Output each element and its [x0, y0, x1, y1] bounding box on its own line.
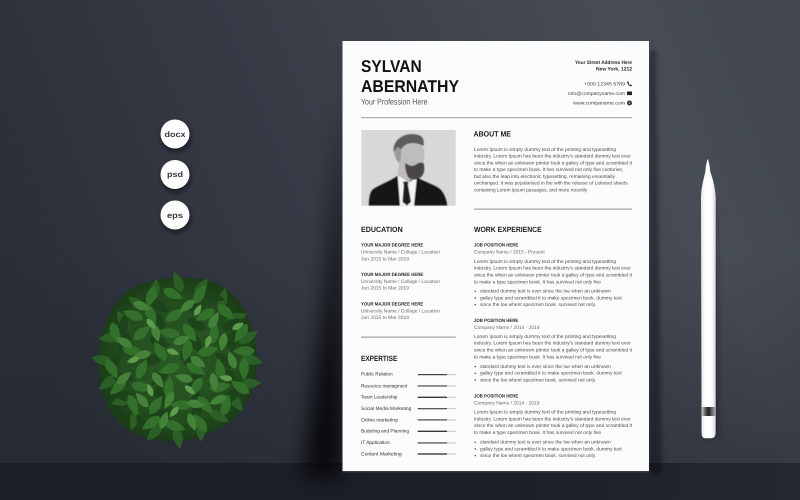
job entry 3: Lorem Ipsum is simply dummy text of the printing and typesetting [474, 410, 616, 416]
contact details [568, 81, 632, 107]
job entry 2: since the loe whent specimen book. survived not only. [480, 377, 596, 383]
section: education: Jun 2015 to Mar 2019 [361, 256, 409, 262]
job entry 3: since the loe whent specimen book. survived not only. [480, 453, 596, 459]
stylus pencil [701, 159, 719, 440]
section: about me: to make a type specimen book. It has survived not only five centuries, [474, 167, 623, 173]
job entry 1: JOB POSITION HERE [474, 243, 518, 248]
section: expertise: Resource managment [361, 383, 408, 389]
job entry 1: since the when an unknown printer took a galley of type and scrambled it [474, 273, 633, 279]
address block [575, 60, 632, 72]
section: education: Jun 2015 to Mar 2019 [361, 315, 409, 321]
profession: Your Profession Here [361, 96, 428, 106]
section: work experience: WORK EXPERIENCE [474, 225, 542, 234]
section: expertise: Team Leadership [361, 395, 398, 401]
section: about me: ABOUT ME [474, 130, 511, 139]
job entry 2: since the when an unknown printer took a galley of type and scrambled it [474, 348, 633, 354]
format badges [160, 120, 190, 232]
address block: New York, 1212 [596, 66, 632, 72]
section: education: University Name / Collage / Location [361, 308, 440, 314]
section: expertise: Social Media Marketing [361, 406, 412, 412]
name heading: SYLVAN [361, 57, 422, 76]
job entry 3: Company Name / 2014 - 2019 [474, 400, 540, 406]
contact details: info@companyname.com [568, 91, 625, 97]
skill bars [418, 374, 456, 455]
section: about me: industry. Lorem Ipsum has been the industry's standard dummy text ever [474, 154, 631, 160]
job entry 1: standard dummy text is ever since the loe when an unknown [480, 289, 611, 295]
section: expertise: Content Marketing [361, 451, 402, 457]
name heading: ABERNATHY [361, 77, 460, 96]
job entry 3 [474, 394, 633, 459]
badge: psd: psd [167, 170, 183, 179]
contact details: www.companame.com [573, 102, 625, 107]
section: education: University Name / Collage / Location [361, 250, 440, 256]
job entry 1: galley type and scrambled it to make specimen book. dummy text [480, 295, 622, 301]
section: about me: containing Lorem Ipsum passages, and more recently [474, 187, 588, 193]
job entry 1: Lorem Ipsum is simply dummy text of the printing and typesetting [474, 259, 616, 265]
job entry 2: JOB POSITION HERE [474, 318, 518, 323]
badge: docx: docx [164, 130, 186, 139]
job entry 3: standard dummy text is ever since the loe when an unknown [480, 440, 611, 446]
badge: eps: eps [167, 211, 184, 220]
plant seen from above [90, 270, 264, 450]
job entry 3: galley type and scrambled it to make specimen book. dummy text [480, 446, 622, 452]
section: education: YOUR MAJOR DEGREE HERE [361, 243, 423, 248]
section: expertise: EXPERTISE [361, 354, 397, 363]
section: education: YOUR MAJOR DEGREE HERE [361, 272, 423, 277]
job entry 2: Lorem Ipsum is simply dummy text of the printing and typesetting [474, 334, 616, 340]
section: about me: unchanged. It was popularised in the with the release of Letraset sheets [474, 180, 628, 186]
section: work experience [474, 225, 633, 459]
contact details: +000 12345 6789 [584, 81, 625, 87]
section: expertise: IT Application [361, 440, 390, 446]
section: expertise: Budeting and Planning [361, 429, 409, 435]
job entry 1: Company Name / 2015 - Present [474, 250, 545, 256]
job entry 2: galley type and scrambled it to make specimen book. dummy text [480, 371, 622, 377]
section: about me: but also the leap into electronic typesetting, remaining essentially [474, 174, 616, 180]
job entry 3: to make a type specimen book. It has survived not only five [474, 430, 601, 436]
section: expertise: Public Relation [361, 372, 393, 378]
section: education [361, 225, 440, 321]
section: education: University Name / Collage / Location [361, 279, 440, 285]
job entry 1: to make a type specimen book. It has survived not only five [474, 279, 601, 285]
job entry 1: since the loe whent specimen book. survived not only. [480, 302, 596, 308]
section: about me [474, 130, 633, 193]
job entry 3: JOB POSITION HERE [474, 394, 518, 399]
job entry 3: since the when an unknown printer took a galley of type and scrambled it [474, 423, 633, 429]
name heading [361, 57, 460, 96]
job entry 2: industry. Lorem Ipsum has been the industry's standard dummy text ever [474, 341, 631, 347]
job entry 2 [474, 318, 633, 383]
job entry 2: Company Name / 2014 - 2019 [474, 325, 540, 331]
job entry 2: standard dummy text is ever since the loe when an unknown [480, 364, 611, 370]
section: expertise [361, 354, 456, 457]
portrait photo [361, 130, 456, 206]
job entry 3: industry. Lorem Ipsum has been the industry's standard dummy text ever [474, 416, 631, 422]
job entry 1: industry. Lorem Ipsum has been the industry's standard dummy text ever [474, 266, 631, 272]
section: about me: Lorem Ipsum is simply dummy text of the printing and typesetting [474, 147, 616, 153]
section: expertise: Online marketing [361, 417, 398, 423]
section: education: EDUCATION [361, 225, 403, 234]
job entry 1 [474, 243, 633, 308]
job entry 2: to make a type specimen book. It has survived not only five [474, 354, 601, 360]
section: education: Jun 2015 to Mar 2019 [361, 286, 409, 292]
section: education: YOUR MAJOR DEGREE HERE [361, 301, 423, 306]
section: about me: since the when an unknown printer took a galley of type and scrambled it [474, 160, 633, 166]
panel: resume sheet [342, 41, 649, 472]
address block: Your Street Address Here [575, 60, 632, 66]
